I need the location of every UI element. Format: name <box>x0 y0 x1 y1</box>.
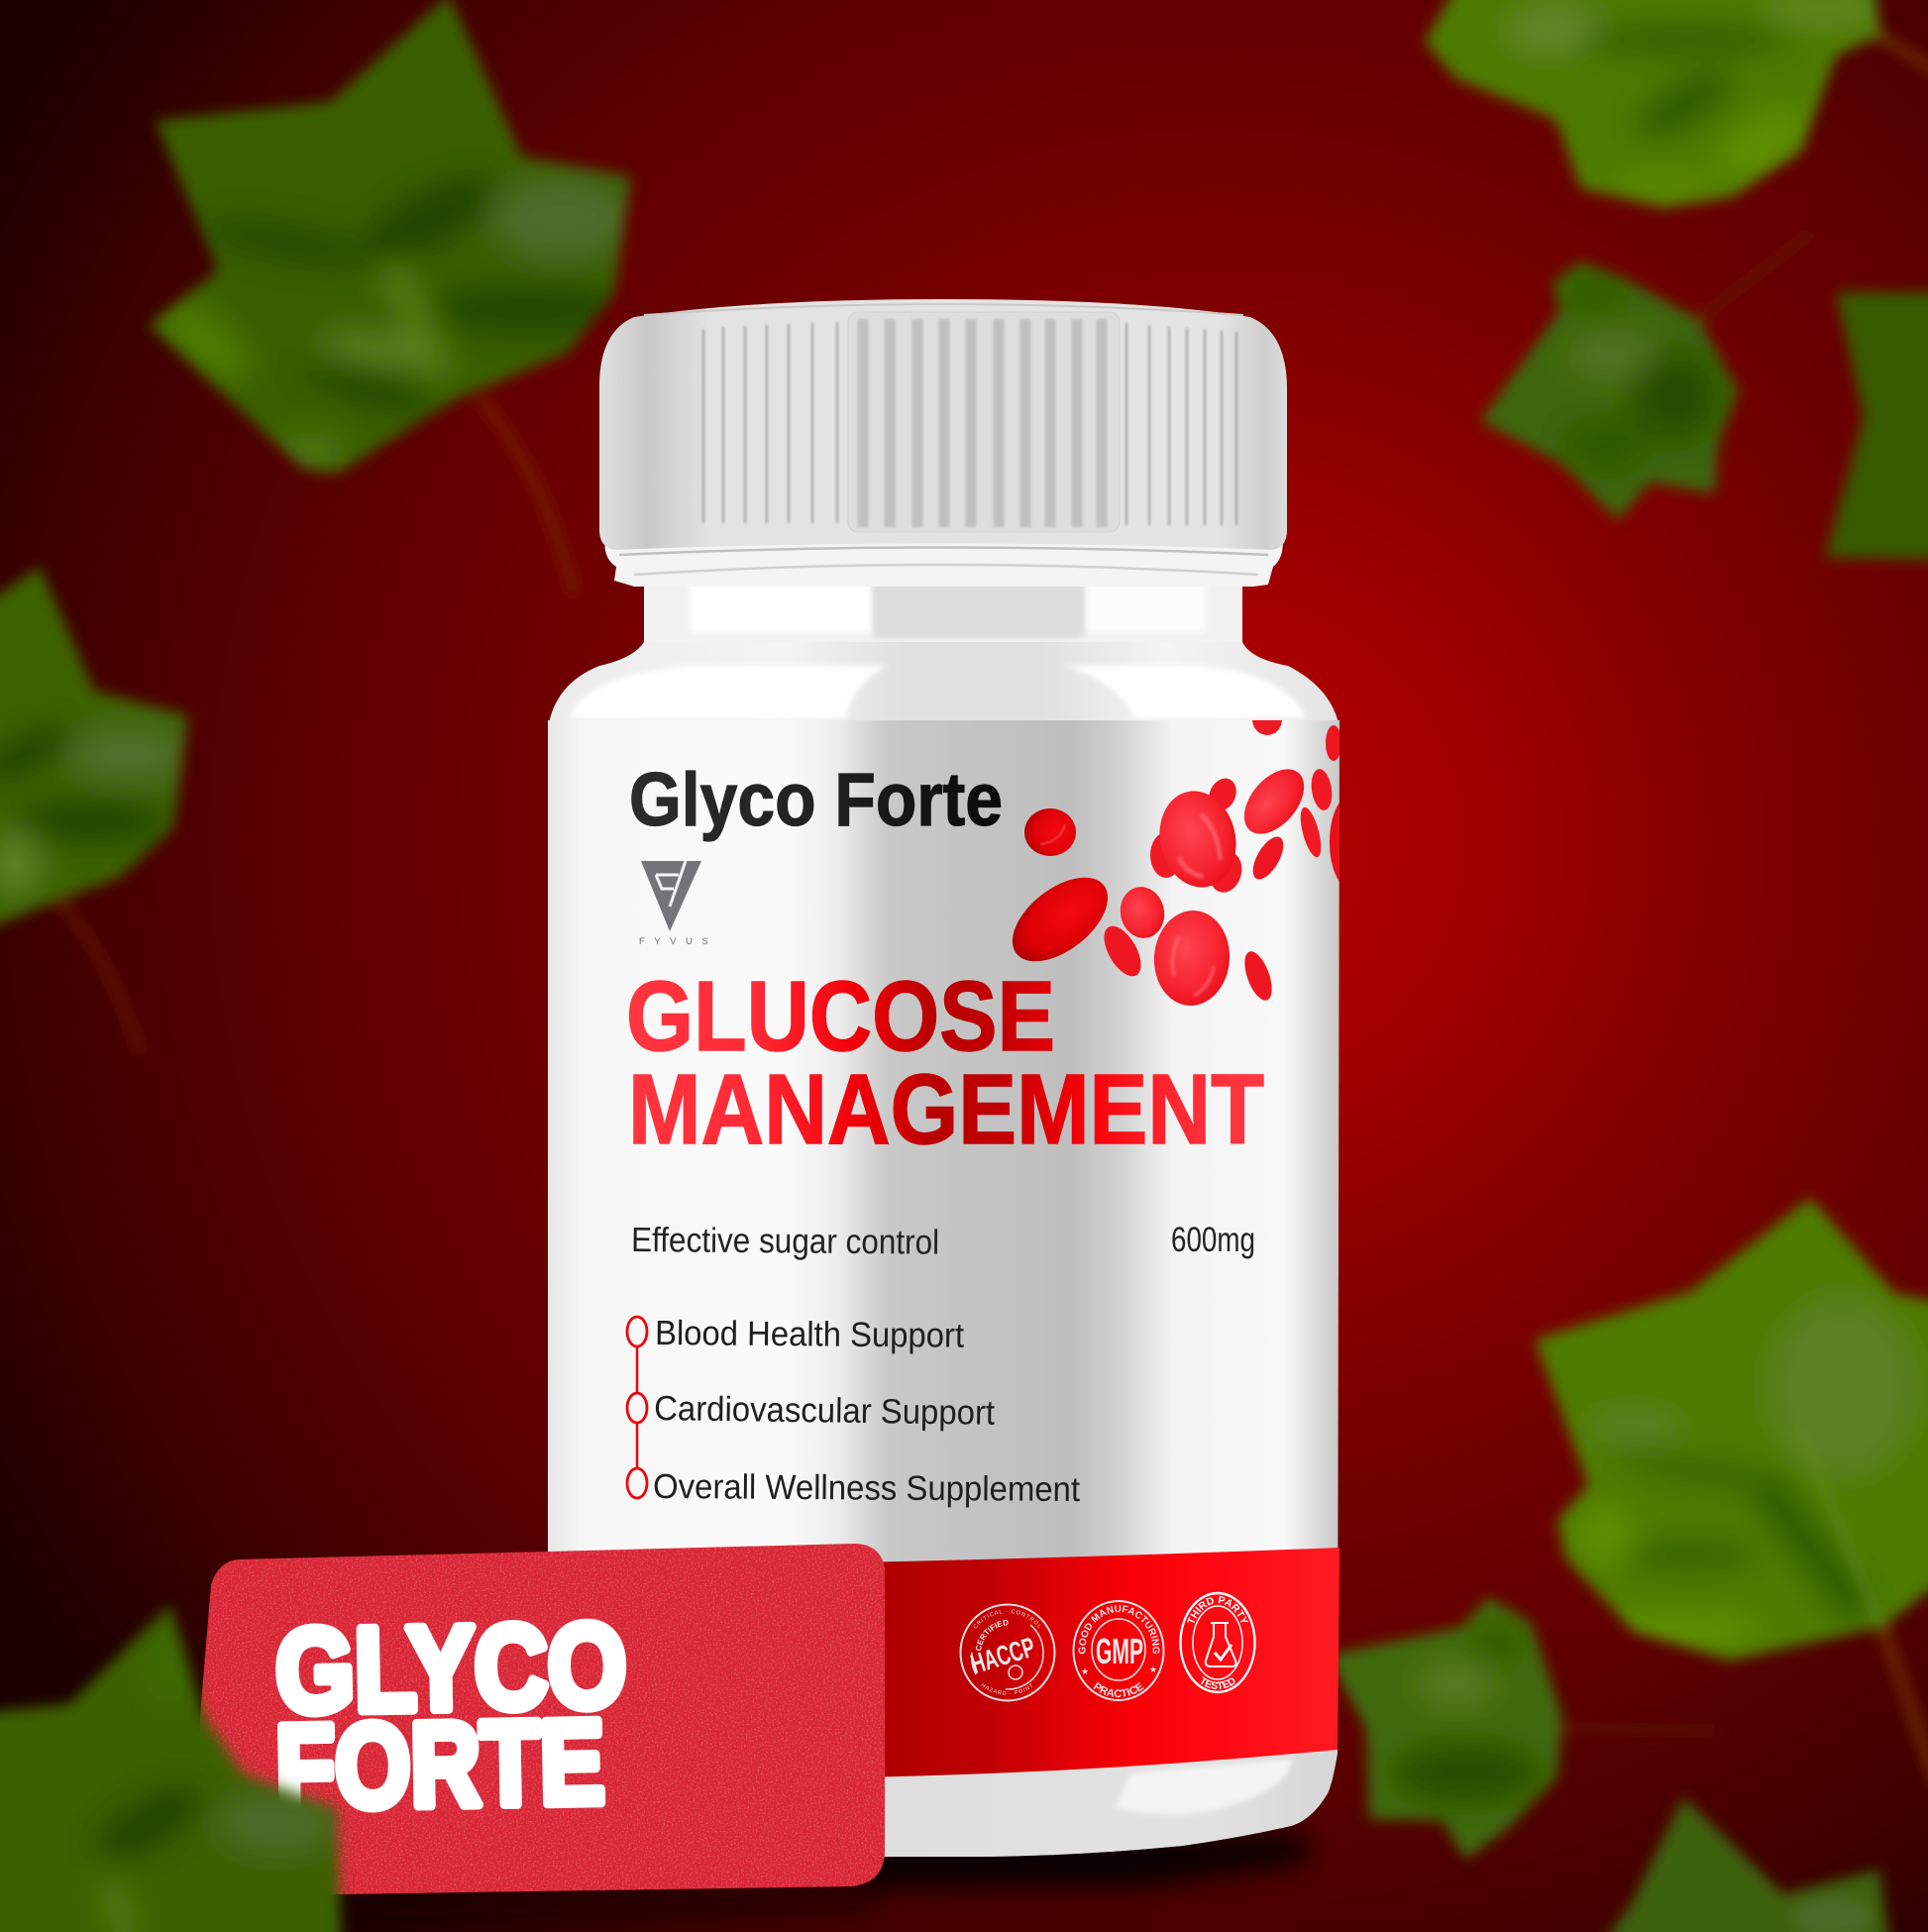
brand name: Glyco Forte <box>629 758 1003 842</box>
card brand text: FORTE <box>274 1695 605 1834</box>
certification seals <box>959 1591 1256 1702</box>
headline <box>626 961 1264 1165</box>
leaf: large lower right <box>1535 1198 1928 1783</box>
leaf: far right edge <box>1825 292 1928 560</box>
product bottle <box>548 299 1339 1857</box>
seal: HACCP: CRITICAL · CONTROL <box>973 1609 1040 1629</box>
card shadow <box>337 1882 872 1917</box>
seal: GMP: PRACTICE <box>1094 1682 1144 1698</box>
description and dosage <box>631 1221 1255 1262</box>
benefits timeline <box>627 1314 1080 1509</box>
leaf: top right <box>1425 0 1928 208</box>
seal: GMP <box>1072 1600 1165 1701</box>
foreground leaf: bottom left <box>0 1605 342 1932</box>
seal: GMP: GOOD MANUFACTURING <box>1078 1605 1160 1655</box>
bottle shoulder <box>548 642 1339 728</box>
seal: GMP: ★ <box>1081 1666 1089 1676</box>
leaf: middle left <box>0 567 188 1055</box>
leaf: top left <box>147 0 631 594</box>
headline: MANAGEMENT <box>628 1054 1264 1165</box>
brand logo: FYVUS: FYVUS <box>639 936 717 947</box>
seal: third party tested <box>1179 1591 1256 1694</box>
leaf: small lower centre right <box>1328 1597 1719 1860</box>
seal: GMP: GMP <box>1096 1631 1143 1671</box>
seal: HACCP <box>959 1603 1056 1702</box>
benefits timeline: Overall Wellness Supplement <box>653 1467 1080 1509</box>
bottle shadow on ground <box>852 1833 1308 1887</box>
cap ridges centre block <box>848 312 1120 532</box>
benefits timeline: Cardiovascular Support <box>654 1389 996 1433</box>
cap ridges left and right <box>703 322 1236 525</box>
bottle neck <box>644 573 1242 659</box>
card brand text: GLYCO <box>274 1599 627 1738</box>
brand logo: FYVUS <box>639 861 717 947</box>
seal: HACCP: CERTIFIED <box>975 1619 1009 1651</box>
seal: third party tested: TESTED <box>1201 1676 1234 1689</box>
red band <box>548 1548 1339 1777</box>
benefits timeline: Blood Health Support <box>655 1314 965 1355</box>
seal: third party tested: THIRD PARTY <box>1187 1596 1248 1623</box>
headline: GLUCOSE <box>626 961 1055 1072</box>
bottle body with white label <box>548 720 1339 1857</box>
lower bottle base <box>548 1750 1338 1857</box>
cap <box>599 299 1287 575</box>
seal: GMP: ★ <box>1149 1664 1157 1674</box>
seal: HACCP: HAZARD · POINT <box>981 1682 1032 1695</box>
cap ring <box>604 530 1283 587</box>
blood cells illustration <box>1013 720 1339 1006</box>
leaf: bottom right <box>1585 1797 1892 1932</box>
card brand text <box>274 1599 627 1834</box>
seal: HACCP: HACCP <box>967 1631 1038 1679</box>
leaf: right middle <box>1480 232 1812 520</box>
red felt brand card <box>188 1544 885 1894</box>
description and dosage: Effective sugar control <box>631 1221 939 1262</box>
description and dosage: 600mg <box>1171 1221 1255 1259</box>
